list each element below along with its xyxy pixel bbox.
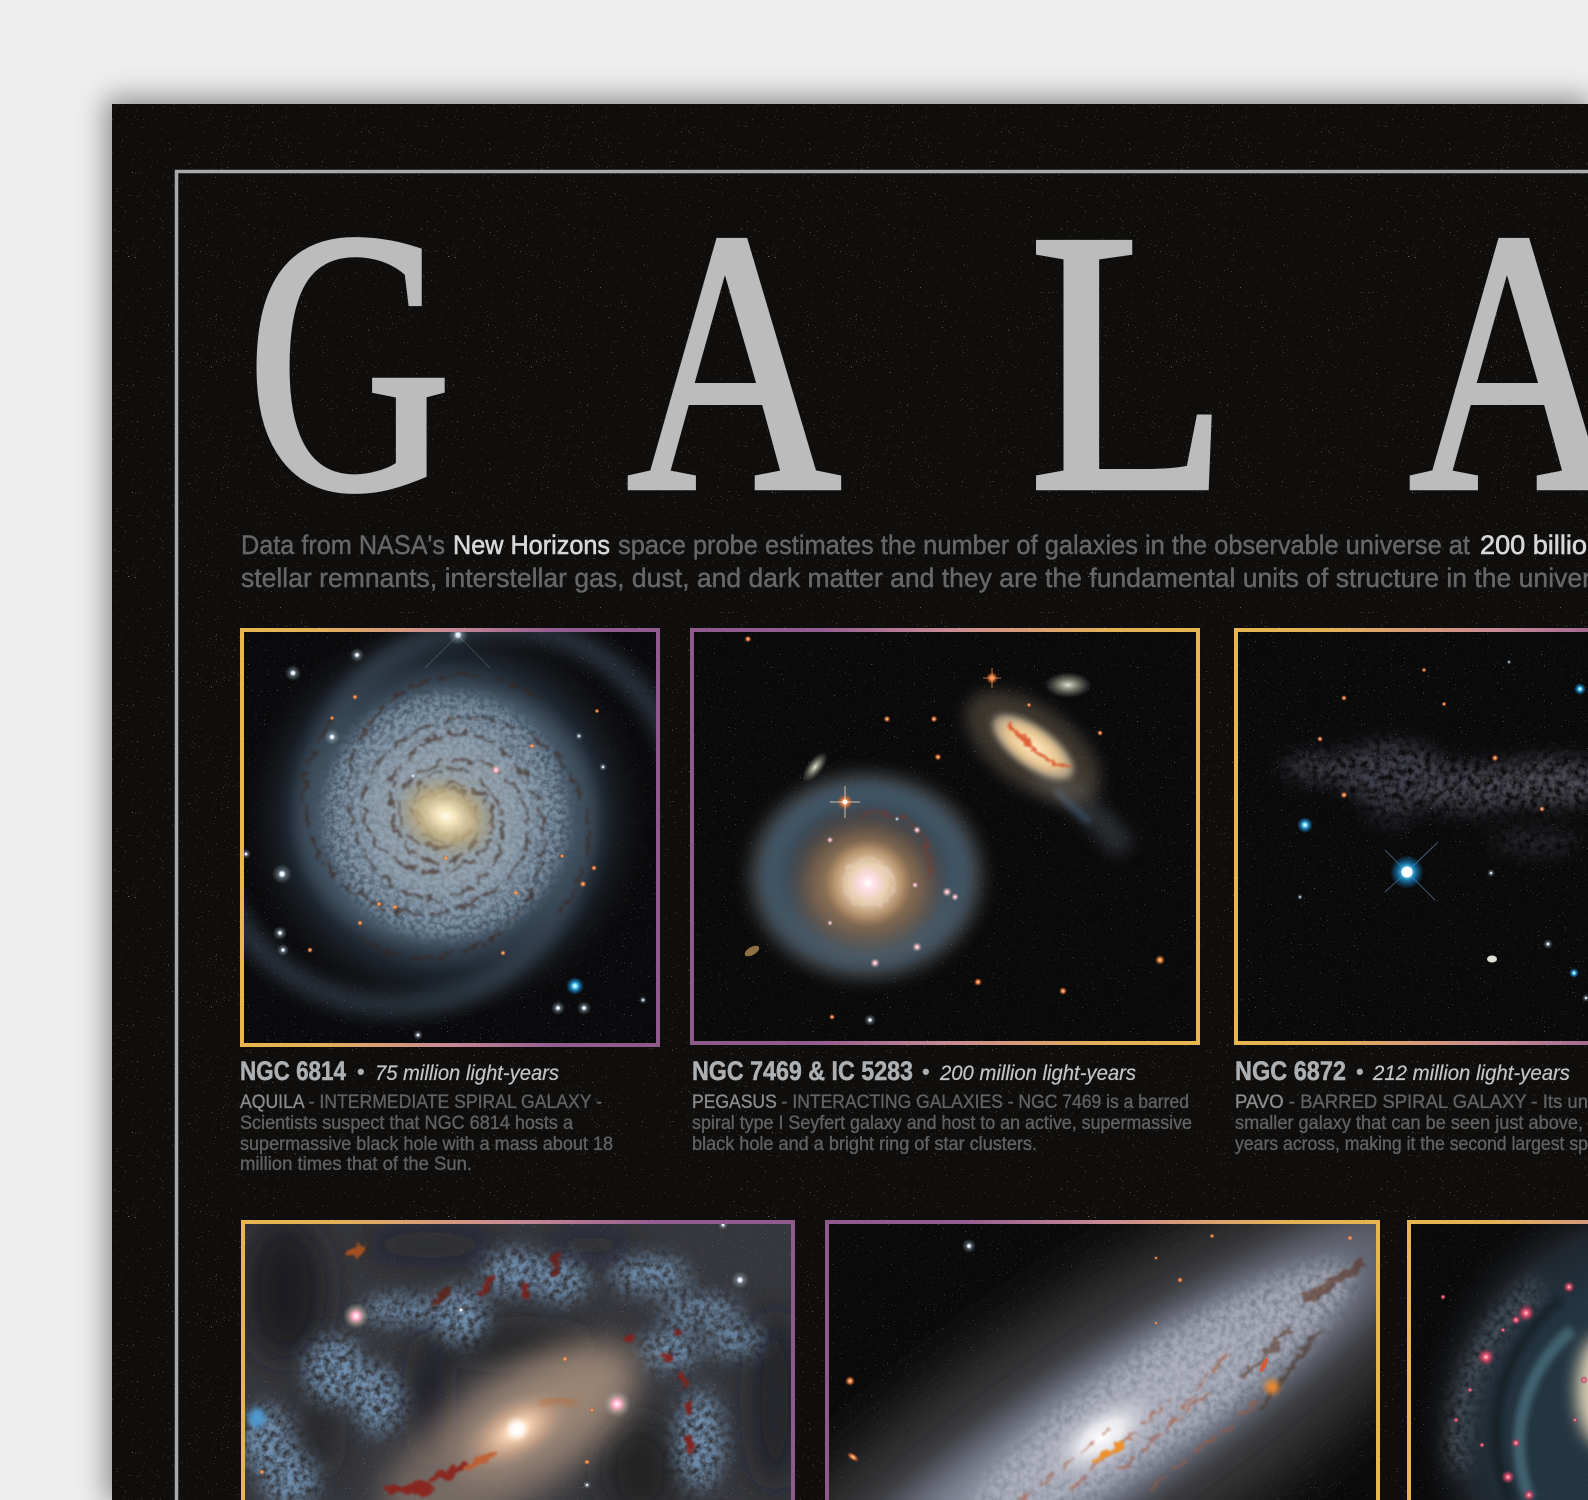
intro text: space probe estimates the number of galaxies in the observable universe at <box>618 530 1471 560</box>
interacting galaxy IC 5283 <box>946 669 1125 850</box>
caption: NGC 7469 and IC 5283 <box>692 1056 1192 1155</box>
orange dust filaments <box>1020 1262 1365 1500</box>
panel: edge-on spiral image lower middle <box>825 1220 1380 1500</box>
frame 1 <box>242 630 658 1045</box>
galaxy 3 stars <box>1297 660 1588 1002</box>
blue star clusters <box>241 1250 763 1500</box>
caption: NGC 6814: supermassive black hole with a mass about 18 <box>240 1134 613 1155</box>
panel: NGC 6814 image <box>240 628 660 1047</box>
galaxy 5 stars <box>845 1234 1353 1464</box>
galaxy 2 stars <box>744 636 1165 1026</box>
galaxy 4 stars <box>259 1220 749 1489</box>
frame 4 <box>243 1222 793 1500</box>
small companion galaxies <box>743 672 1092 958</box>
panel: barred spiral image lower left <box>241 1220 799 1500</box>
title <box>247 154 1588 569</box>
intro text: New Horizons <box>453 530 610 560</box>
caption: NGC 6814: AQUILA - INTERMEDIATE SPIRAL GALAXY - <box>240 1092 602 1113</box>
galaxy 1 stars <box>241 625 647 1040</box>
caption: NGC 7469 and IC 5283: PEGASUS - INTERACTING GALAXIES - NGC 7469 is a barred <box>692 1092 1189 1113</box>
pink star-forming regions <box>1440 1281 1588 1500</box>
panel: spiral image lower right <box>1407 1220 1588 1500</box>
title: G <box>247 154 451 569</box>
caption: NGC 6872 <box>1235 1056 1588 1155</box>
caption: NGC 6814: Scientists suspect that NGC 6814 hosts a <box>240 1113 573 1134</box>
caption: NGC 6872: PAVO - BARRED SPIRAL GALAXY - Its un <box>1235 1092 1588 1113</box>
caption: NGC 7469 and IC 5283: 200 million light-years <box>939 1062 1136 1085</box>
caption: NGC 6814: 75 million light-years <box>375 1062 559 1085</box>
frame 5 <box>827 1222 1378 1500</box>
caption: NGC 7469 and IC 5283: black hole and a bright ring of star clusters. <box>692 1134 1037 1155</box>
caption: NGC 6814: million times that of the Sun. <box>240 1154 472 1175</box>
intro text <box>241 530 1588 593</box>
caption: NGC 7469 and IC 5283: NGC 7469 & IC 5283 <box>692 1056 913 1086</box>
caption: NGC 6814: • <box>357 1059 365 1084</box>
red dust <box>343 1240 695 1495</box>
big spiral NGC 7469 <box>744 768 988 984</box>
intro text: Data from NASA's <box>241 530 445 560</box>
frame 2 <box>692 630 1198 1043</box>
faint spiral arm <box>1282 742 1588 854</box>
frame 6 <box>1409 1222 1588 1500</box>
panel: NGC 6872 image <box>1236 628 1588 1043</box>
intro text: stellar remnants, interstellar gas, dust, and dark matter and they are the fundamental units of structure in the universe <box>241 563 1588 593</box>
title: L <box>1029 155 1229 569</box>
dark dust lanes <box>245 1220 799 1500</box>
frame 3 <box>1236 630 1588 1043</box>
caption: NGC 7469 and IC 5283: • <box>922 1059 930 1084</box>
title: A <box>627 155 841 569</box>
caption: NGC 6872: 212 million light-years <box>1372 1062 1570 1085</box>
caption: NGC 6872: • <box>1356 1059 1364 1084</box>
outer frame line <box>176 172 1588 1500</box>
caption: NGC 6814: NGC 6814 <box>240 1056 346 1086</box>
caption: NGC 7469 and IC 5283: spiral type I Seyfert galaxy and host to an active, supermassive <box>692 1113 1192 1134</box>
panel: NGC 7469 and IC 5283 image <box>692 628 1198 1043</box>
caption: NGC 6814 <box>240 1056 613 1175</box>
bar and core glow <box>368 1324 655 1500</box>
caption: NGC 6872: NGC 6872 <box>1235 1056 1346 1086</box>
